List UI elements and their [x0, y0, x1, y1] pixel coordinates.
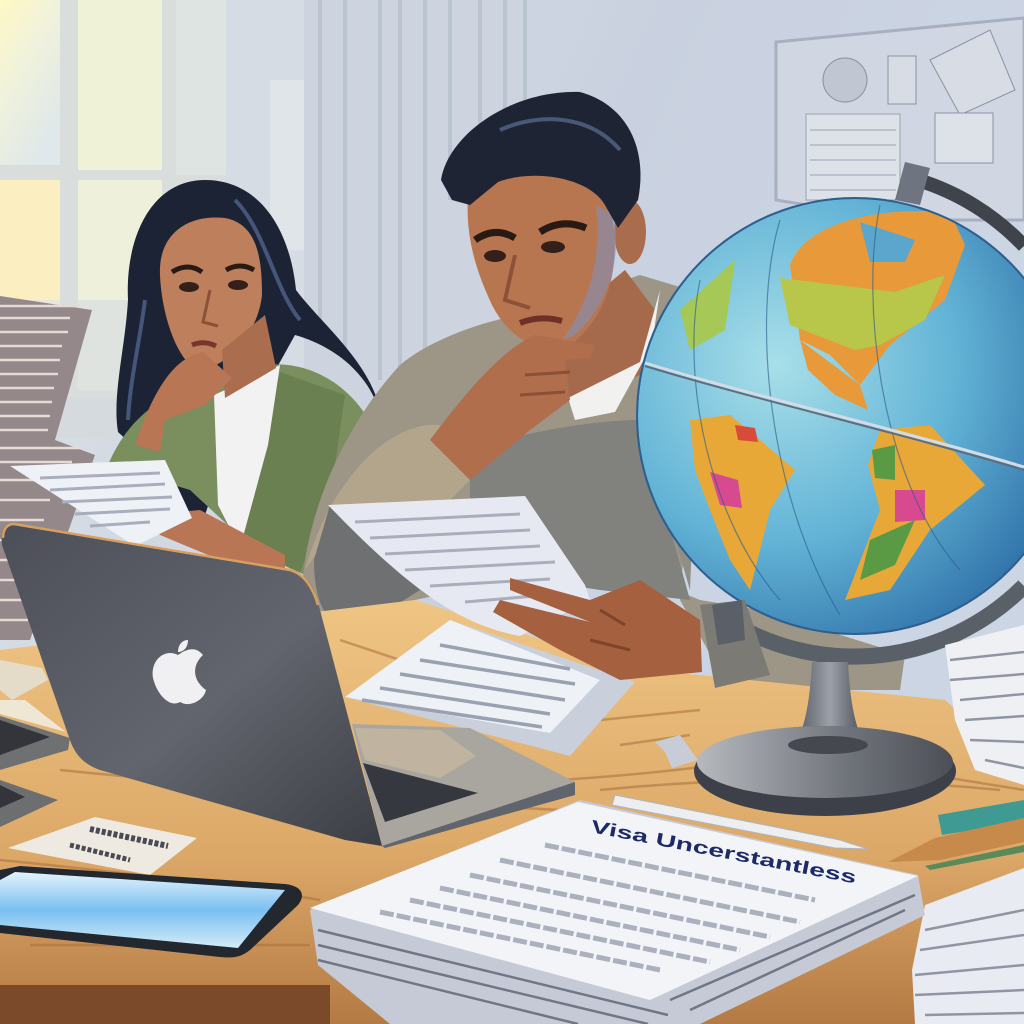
North America	[790, 211, 965, 385]
man ear	[614, 200, 646, 264]
woman face	[160, 217, 262, 370]
man sweater	[302, 275, 905, 690]
woman hand	[135, 352, 232, 452]
man hand on chin	[430, 335, 595, 480]
paper stack left background	[0, 296, 95, 640]
bottom right paper stack	[912, 868, 1024, 1024]
main visa document stack	[310, 800, 925, 1024]
window	[0, 0, 235, 438]
document under man's hands	[345, 620, 635, 756]
globe	[636, 162, 1024, 657]
calculator	[0, 660, 70, 827]
curtain	[226, 0, 534, 420]
man face	[468, 173, 615, 348]
laptop	[2, 524, 575, 848]
paper held by woman	[10, 460, 192, 546]
Top left green	[680, 260, 735, 350]
meridian ring	[712, 586, 1024, 657]
man hair	[441, 92, 641, 228]
crumpled paper	[655, 735, 698, 768]
laptop trackpad	[355, 728, 476, 778]
wall chart board	[776, 18, 1024, 220]
laptop lid	[2, 524, 382, 846]
globe stand	[694, 600, 956, 816]
desk	[0, 600, 1024, 1024]
meridians	[694, 205, 960, 615]
laptop keyboard base	[352, 724, 575, 846]
paper held by man	[328, 496, 590, 636]
woman hair	[116, 180, 382, 545]
right paper stack	[945, 625, 1024, 785]
man neck	[540, 270, 655, 405]
document body text lines	[380, 845, 815, 970]
woman t-shirt	[214, 365, 280, 548]
background wall	[0, 0, 1024, 700]
pens	[888, 800, 1024, 870]
man	[302, 92, 905, 690]
pencil	[612, 795, 868, 849]
laptop keys	[363, 763, 478, 822]
man's hand	[493, 578, 770, 688]
small note card	[8, 817, 197, 875]
woman	[108, 180, 382, 575]
man sleeve	[314, 505, 420, 628]
apple logo	[153, 640, 206, 704]
South America left	[690, 415, 795, 590]
document title: Visa Uncerstantless	[589, 816, 858, 887]
phone	[0, 866, 302, 957]
woman jacket	[108, 364, 372, 575]
South America right	[845, 425, 985, 600]
